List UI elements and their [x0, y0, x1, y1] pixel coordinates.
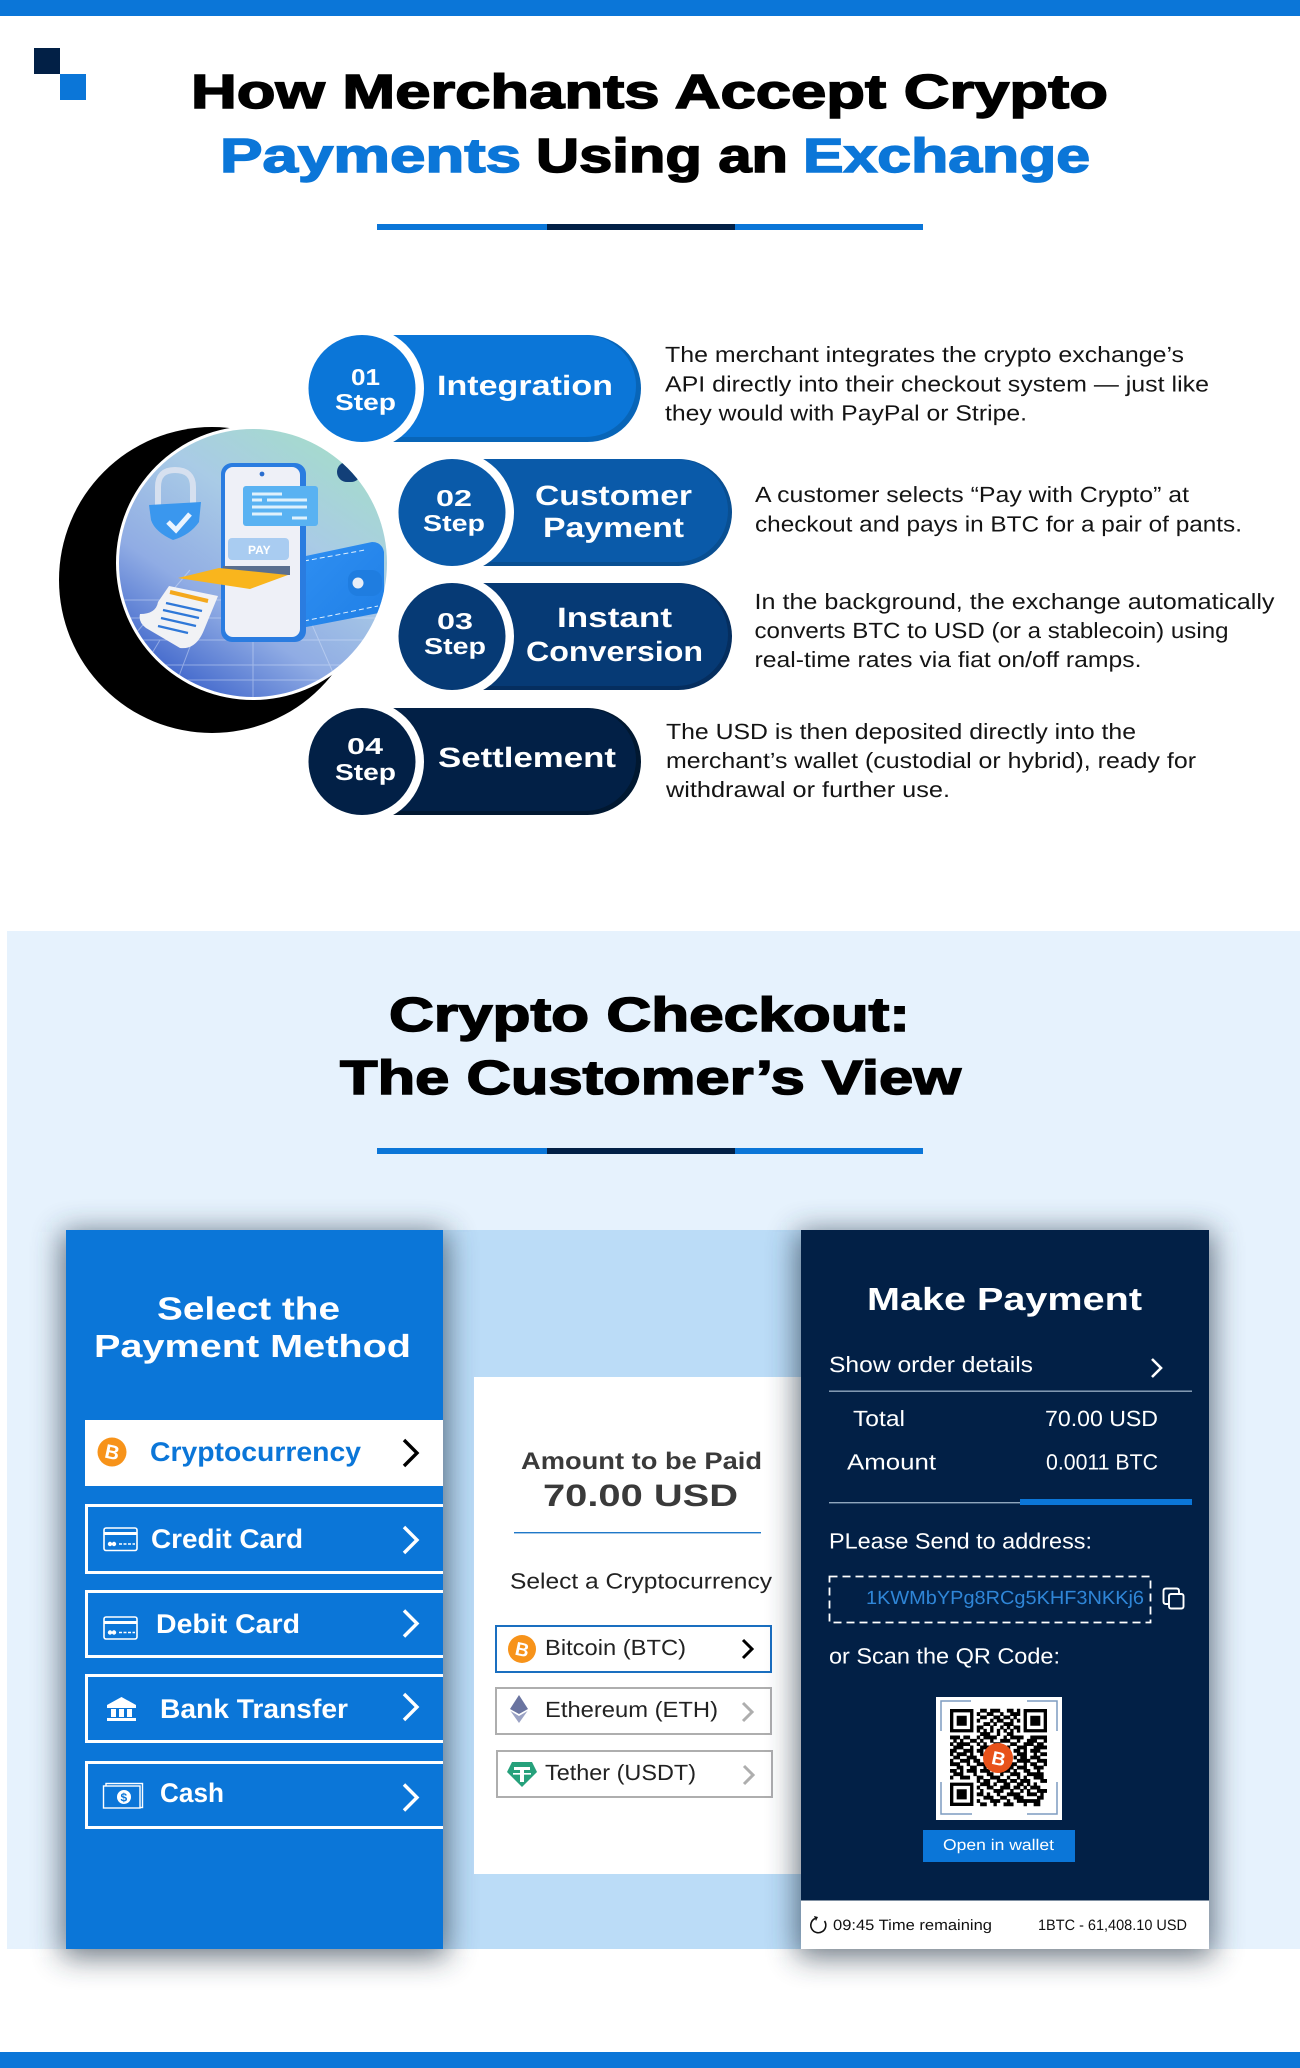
step 03: Instant Conversion: Step — [424, 633, 486, 659]
option: bitcoin: Bitcoin (BTC) — [545, 1635, 686, 1660]
step 03 description: converts BTC to USD (or a stablecoin) using — [754, 618, 1228, 643]
panel heading — [94, 1290, 411, 1364]
step 04: Settlement: 04 — [347, 733, 383, 759]
step 04: Settlement: Settlement — [438, 742, 616, 773]
checkout heading: The Customer’s View — [340, 1052, 962, 1105]
panel: amount and cryptocurrency selection — [474, 1377, 801, 1874]
panel: make payment: Show order details — [829, 1352, 1033, 1377]
timer footer — [801, 1900, 1209, 1949]
illustration: payment scene — [59, 426, 390, 733]
panel: make payment: or Scan the QR Code: — [829, 1644, 1060, 1668]
QR code — [936, 1697, 1062, 1820]
middle panel backing — [443, 1230, 801, 1949]
QR code: B — [990, 1748, 1007, 1771]
order summary: 0.0011 BTC — [1046, 1450, 1158, 1474]
option: bitcoin — [496, 1626, 771, 1672]
title: Using an — [536, 130, 788, 183]
step 01 description: API directly into their checkout system — just like — [665, 372, 1209, 396]
step 03 description: real-time rates via fiat on/off ramps. — [754, 647, 1142, 672]
step 04 description: merchant’s wallet (custodial or hybrid), ready for — [666, 748, 1196, 773]
panel heading: Select the — [157, 1290, 340, 1326]
option: debit card: Debit Card — [156, 1609, 300, 1639]
panel: amount and cryptocurrency selection: Amount to be Paid — [521, 1448, 762, 1475]
option: cash: Cash — [160, 1778, 224, 1808]
step 01 description: they would with PayPal or Stripe. — [665, 400, 1027, 426]
order summary — [847, 1406, 1158, 1474]
checkout heading: Crypto Checkout: — [389, 989, 910, 1042]
step 01: Integration: 01 — [351, 364, 380, 390]
option: cash: $ — [120, 1790, 128, 1804]
step 02: Customer Payment: Customer — [535, 480, 692, 511]
top bar — [0, 0, 1300, 16]
wallet address: 1KWMbYPg8RCg5KHF3NKKj6 — [866, 1588, 1144, 1609]
panel: amount and cryptocurrency selection: Select a Cryptocurrency — [510, 1568, 772, 1594]
option: bank transfer — [86, 1676, 443, 1742]
checkout divider — [377, 1148, 923, 1154]
option: tether: Tether (USDT) — [545, 1760, 696, 1785]
icon: phone: PAY — [248, 543, 271, 557]
panel: make payment — [797, 1230, 1213, 1957]
step 03: Instant Conversion — [390, 574, 732, 698]
logo mark — [34, 48, 86, 100]
option: debit card — [86, 1592, 443, 1656]
step 04: Settlement — [300, 700, 641, 824]
step 03: Instant Conversion: 03 — [437, 608, 473, 634]
timer footer: 1BTC - 61,408.10 USD — [1038, 1917, 1187, 1934]
title divider — [377, 224, 923, 230]
option: bitcoin: B — [513, 1639, 531, 1662]
button: open in wallet: Open in wallet — [943, 1837, 1055, 1854]
panel heading: Payment Method — [94, 1328, 411, 1364]
title: How Merchants Accept Crypto — [191, 66, 1108, 119]
wallet address — [830, 1576, 1150, 1622]
step 02 description — [755, 482, 1242, 536]
order summary: Total — [853, 1406, 905, 1431]
step 04 description: withdrawal or further use. — [665, 777, 950, 802]
step 02: Customer Payment: Step — [423, 510, 485, 536]
icon: padlock — [149, 470, 201, 540]
bottom bar — [0, 2052, 1300, 2068]
step 01: Integration — [300, 326, 641, 450]
step 02: Customer Payment: 02 — [436, 485, 472, 511]
step 03: Instant Conversion: Conversion — [526, 636, 703, 667]
panel: make payment: Make Payment — [867, 1281, 1142, 1317]
option: bank transfer: Bank Transfer — [160, 1694, 349, 1724]
icon: yellow card — [178, 568, 288, 589]
step 02 description: checkout and pays in BTC for a pair of pants. — [755, 512, 1242, 536]
button: open in wallet — [923, 1830, 1075, 1862]
title — [191, 66, 1108, 183]
icon: phone — [221, 463, 318, 642]
step 03 description — [754, 589, 1274, 672]
panel: select payment method — [62, 1230, 447, 1957]
step 02: Customer Payment: Payment — [543, 512, 684, 543]
step 03: Instant Conversion: Instant — [557, 602, 672, 633]
icon: receipt — [140, 586, 218, 648]
step 01: Integration: Integration — [437, 370, 613, 401]
order summary: 70.00 USD — [1045, 1406, 1158, 1431]
step 03 description: In the background, the exchange automatically — [754, 589, 1274, 614]
timer footer: 09:45 Time remaining — [833, 1917, 992, 1934]
option: ethereum — [496, 1688, 771, 1734]
icon: copy — [1164, 1588, 1184, 1608]
checkout heading — [340, 989, 962, 1105]
step 01 description — [665, 342, 1209, 426]
title: Payments — [220, 130, 521, 183]
option: cryptocurrency: B — [103, 1441, 121, 1465]
step 04 description — [665, 719, 1196, 802]
step 04 description: The USD is then deposited directly into the — [666, 719, 1136, 744]
step 04: Settlement: Step — [335, 759, 396, 785]
option: cash — [86, 1762, 443, 1828]
checkout section background — [7, 931, 1300, 1949]
order summary: Amount — [847, 1450, 936, 1474]
panel: amount and cryptocurrency selection: 70.00 USD — [543, 1478, 738, 1513]
step 02: Customer Payment — [390, 450, 732, 574]
step 01 description: The merchant integrates the crypto exchange’s — [665, 342, 1184, 367]
step 02 description: A customer selects “Pay with Crypto” at — [755, 482, 1189, 507]
step 01: Integration: Step — [335, 389, 396, 415]
option: ethereum: Ethereum (ETH) — [545, 1697, 718, 1722]
option: cryptocurrency — [85, 1420, 443, 1486]
option: tether — [497, 1751, 772, 1797]
option: credit card: Credit Card — [151, 1524, 303, 1554]
option: cryptocurrency: Cryptocurrency — [150, 1437, 361, 1467]
option: credit card — [86, 1506, 443, 1572]
title: Exchange — [803, 130, 1090, 183]
panel: make payment: PLease Send to address: — [829, 1528, 1092, 1554]
